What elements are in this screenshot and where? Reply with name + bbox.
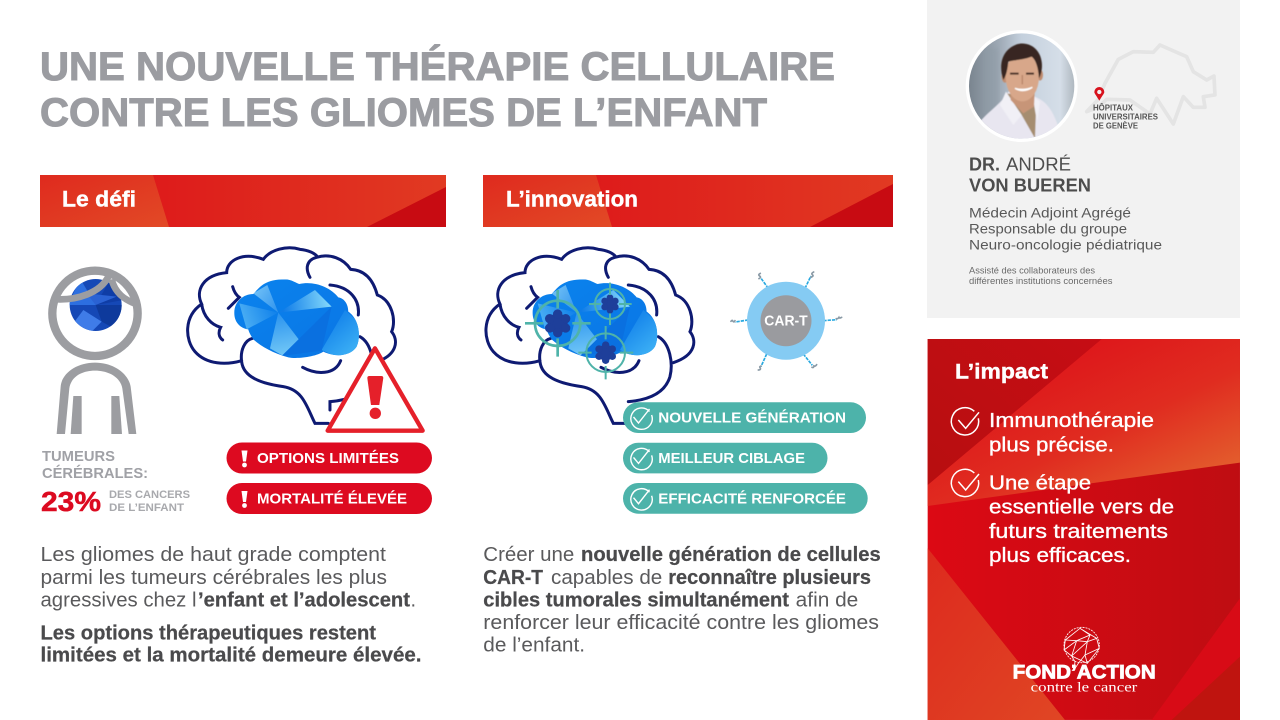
name: DR.: [969, 154, 1000, 175]
map of Switzerland with pin: UNIVERSITAIRES: [1093, 112, 1158, 122]
pill: efficacité renforcée: EFFICACITÉ RENFORCÉE: [658, 490, 846, 508]
text block: le défi: Les options thérapeutiques restent: [40, 622, 376, 644]
name: ANDRÉ: [1006, 154, 1071, 175]
note: [969, 266, 1113, 286]
text block: le défi: Les gliomes de haut grade comptent: [40, 544, 386, 566]
brain with tumour and warning: [188, 248, 423, 431]
banner: le défi: [40, 175, 446, 227]
role: Neuro-oncologie pédiatrique: [969, 237, 1162, 253]
text block: l'innovation: Créer une: [483, 544, 574, 566]
icon: check 2: [951, 469, 979, 497]
statistic: tumeurs cérébrales: 23%: [41, 486, 101, 517]
text block: l'innovation: nouvelle génération de cellules: [581, 544, 881, 566]
text block: le défi: agressives chez l: [40, 590, 196, 612]
statistic: tumeurs cérébrales: DES CANCERS: [109, 489, 190, 501]
item 1: Immunothérapie: [989, 410, 1154, 432]
portrait: [966, 30, 1078, 142]
statistic: tumeurs cérébrales: CÉRÉBRALES:: [42, 465, 148, 482]
item 2: Une étape: [989, 473, 1091, 495]
text block: l'innovation: CAR-T: [483, 567, 543, 589]
pill: mortalité élevée: MORTALITÉ ÉLEVÉE: [257, 490, 407, 508]
title: [40, 44, 835, 135]
map of Switzerland with pin: HÔPITAUX: [1093, 102, 1133, 113]
text block: l'innovation: afin de: [796, 590, 858, 612]
item 2: futurs traitements: [989, 521, 1168, 543]
text block: l'innovation: capables de: [551, 567, 662, 589]
pill: mortalité élevée: [226, 483, 432, 514]
statistic: tumeurs cérébrales: TUMEURS: [42, 448, 115, 465]
tumour targets: [525, 283, 633, 379]
map of Switzerland with pin: [1087, 45, 1215, 130]
statistic: tumeurs cérébrales: DE L’ENFANT: [109, 502, 184, 514]
text block: le défi: parmi les tumeurs cérébrales les plus: [40, 567, 387, 589]
panel: l'impact: [928, 339, 1240, 720]
item 1: plus précise.: [989, 434, 1114, 456]
text block: le défi: limitées et la mortalité demeure élevée.: [40, 644, 422, 666]
brain with targeted tumours: [486, 248, 694, 423]
pill: nouvelle génération: NOUVELLE GÉNÉRATION: [658, 410, 846, 426]
pill: meilleur ciblage: [623, 443, 828, 473]
text block: le défi: ’enfant et l’adolescent: [198, 590, 410, 612]
logo: fond'action: FOND’ACTION: [1013, 661, 1156, 683]
role: [969, 205, 1162, 253]
heading: L’impact: [955, 360, 1048, 384]
logo: fond'action: contre le cancer: [1031, 680, 1138, 695]
icon: child with tumour: [52, 271, 138, 434]
pill: meilleur ciblage: MEILLEUR CIBLAGE: [658, 450, 805, 467]
statistic: tumeurs cérébrales: [41, 448, 190, 517]
text block: l'innovation: de l’enfant.: [483, 634, 585, 656]
item 1: [989, 410, 1154, 456]
role: Responsable du groupe: [969, 220, 1127, 236]
text block: l'innovation: [483, 544, 881, 656]
pill: nouvelle génération: [623, 402, 866, 433]
text block: l'innovation: cibles tumorales simultanément: [483, 590, 789, 612]
text block: le défi: .: [410, 590, 416, 612]
note: Assisté des collaborateurs des: [969, 266, 1096, 276]
role: Médecin Adjoint Agrégé: [969, 205, 1131, 221]
logo: fond'action: [1013, 627, 1156, 695]
icon: CAR-T cell: CAR-T: [764, 314, 808, 330]
pill: options limitées: [226, 442, 432, 474]
item 2: plus efficaces.: [989, 545, 1131, 567]
text block: le défi: [40, 544, 422, 666]
note: différentes institutions concernées: [969, 276, 1113, 286]
title: CONTRE LES GLIOMES DE L’ENFANT: [40, 91, 767, 135]
pill: options limitées: OPTIONS LIMITÉES: [257, 450, 399, 467]
map of Switzerland with pin: DE GENÈVE: [1093, 120, 1138, 130]
banner: l'innovation: [483, 175, 893, 227]
banner: le défi: Le défi: [62, 186, 136, 212]
panel: researcher: [927, 0, 1240, 318]
text block: l'innovation: renforcer leur efficacité contre les gliomes: [483, 612, 879, 634]
text block: l'innovation: reconnaître plusieurs: [668, 567, 871, 589]
banner: l'innovation: L’innovation: [506, 186, 638, 212]
icon: CAR-T cell: [731, 272, 842, 370]
title: UNE NOUVELLE THÉRAPIE CELLULAIRE: [40, 44, 835, 89]
item 2: essentielle vers de: [989, 497, 1174, 519]
name: [969, 154, 1091, 196]
name: VON BUEREN: [969, 175, 1091, 196]
icon: check 1: [951, 408, 979, 435]
pill: efficacité renforcée: [623, 483, 868, 514]
item 2: [989, 473, 1174, 567]
